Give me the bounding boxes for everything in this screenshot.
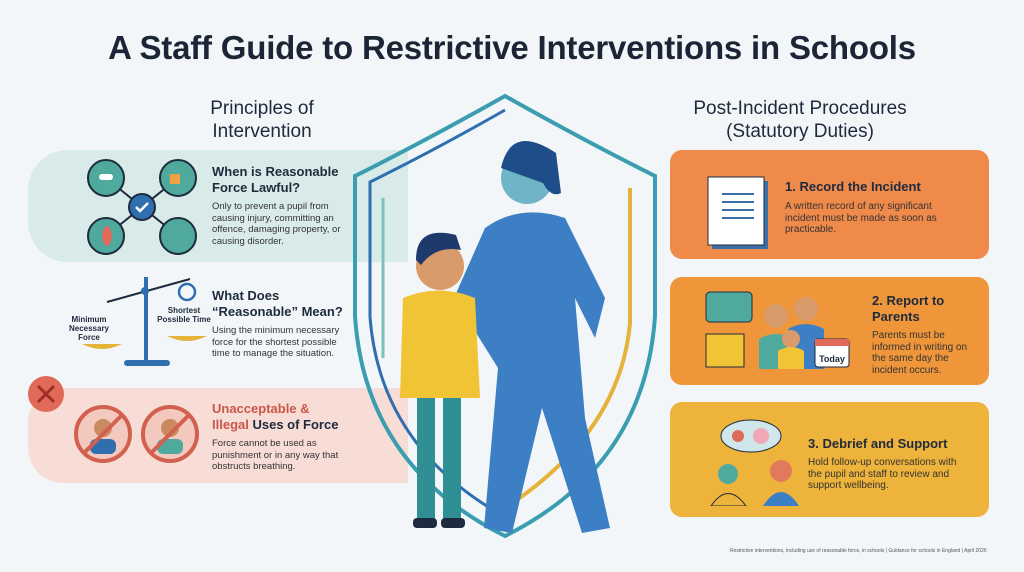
panel: reasonable scales: Force (78, 333, 100, 342)
illustration: shield with teacher and pupil (353, 94, 657, 538)
text: lawful: When is Reasonable (212, 164, 338, 179)
card: record (670, 150, 989, 259)
text: report: 2. Report to (872, 293, 944, 308)
text: record (785, 179, 937, 235)
text: reasonable: “Reasonable” Mean? (212, 304, 343, 319)
heading: post-incident: (Statutory Duties) (726, 121, 874, 142)
pupil (416, 242, 464, 290)
icon: family and messages (706, 292, 850, 369)
text: report (872, 293, 967, 376)
icon: family and messages: Today (819, 354, 845, 364)
text: record: 1. Record the Incident (785, 179, 921, 194)
panel: reasonable scales: Possible Time (157, 315, 211, 324)
panel: lawful force (28, 150, 408, 262)
heading: post-incident (693, 98, 907, 142)
teacher (501, 152, 553, 204)
panel: reasonable scales: Minimum (71, 315, 107, 324)
card: report (670, 277, 989, 385)
text: unacceptable (212, 401, 338, 472)
text: unacceptable: Illegal Uses of Force (212, 417, 338, 432)
card: debrief (670, 402, 989, 517)
text: unacceptable: Unacceptable & (212, 401, 310, 416)
icon: conversation (710, 420, 799, 506)
text: debrief: 3. Debrief and Support (808, 436, 947, 451)
text: record: A written record of any significant incident must be made as soon as practicable. (785, 201, 937, 235)
icon: network of circles (87, 159, 197, 255)
panel: reasonable scales: Shortest (168, 306, 201, 315)
text: lawful: Only to prevent a pupil from causing injury, committing an offence, damaging property, or causing disorder. (212, 201, 341, 246)
heading: principles: Principles of (210, 98, 314, 119)
panel: unacceptable (28, 388, 408, 483)
text: debrief (808, 436, 956, 491)
panel: reasonable scales (69, 277, 211, 366)
text: report: Parents must be informed in writing on the same day the incident occurs. (872, 330, 967, 376)
text: debrief: Hold follow-up conversations with the pupil and staff to review and support wellbeing. (808, 457, 956, 491)
text: lawful: Force Lawful? (212, 180, 300, 195)
text: reasonable (212, 288, 343, 359)
text: reasonable: What Does (212, 288, 279, 303)
heading: post-incident: Post-Incident Procedures (693, 98, 907, 119)
icon: red cross (28, 376, 64, 412)
text: reasonable: Using the minimum necessary force for the shortest possible time to manage the situation. (212, 325, 339, 359)
icon: prohibited figures (74, 405, 199, 463)
text: unacceptable: Force cannot be used as punishment or in any way that obstructs breathing. (212, 438, 338, 472)
text: report: Parents (872, 309, 920, 324)
footer: Restrictive interventions, including use of reasonable force, in schools | Guidance for schools in England | April 2026 (730, 548, 987, 554)
icon: notebook (708, 176, 768, 249)
heading: principles (210, 98, 314, 142)
text: lawful (212, 164, 341, 246)
panel: reasonable scales: Necessary (69, 324, 110, 333)
title: A Staff Guide to Restrictive Interventions in Schools (108, 29, 916, 66)
heading: principles: Intervention (212, 121, 312, 142)
